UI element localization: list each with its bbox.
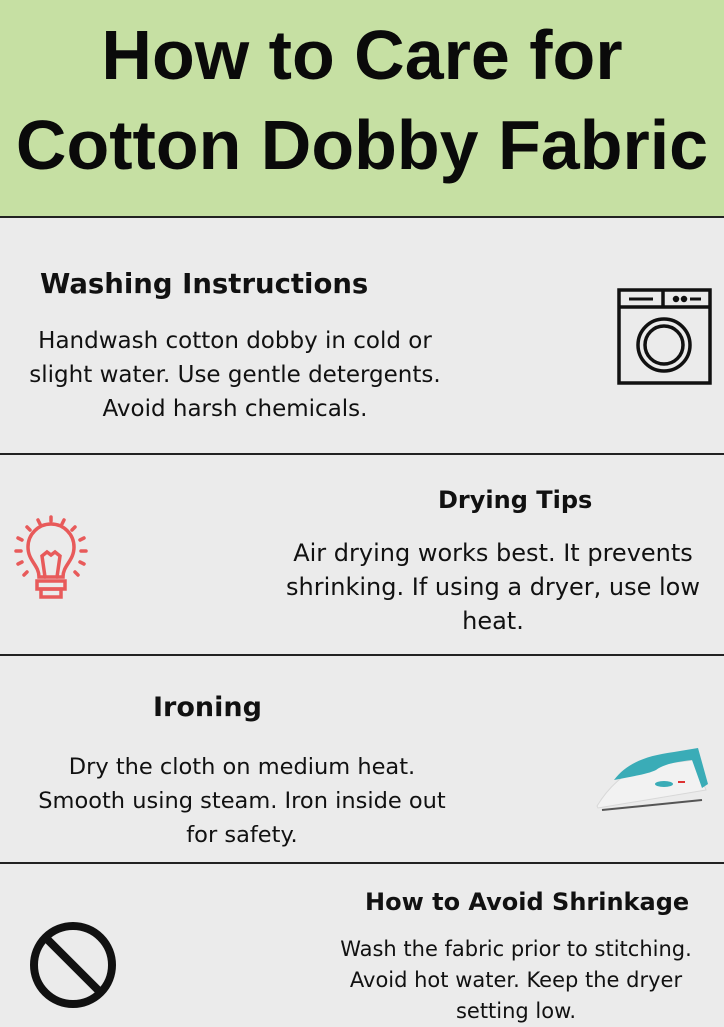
heading: shrinkage: How to Avoid Shrinkage: [365, 888, 689, 916]
text: drying: shrinking. If using a dryer, use low: [286, 573, 700, 601]
title band: [0, 0, 724, 216]
text: drying: Air drying works best. It prevents: [293, 539, 693, 567]
text: ironing: Smooth using steam. Iron inside out: [38, 788, 446, 814]
text: ironing: for safety.: [186, 822, 298, 848]
panel: ironing: [38, 692, 708, 848]
text: shrinkage: Wash the fabric prior to stitching.: [340, 937, 692, 961]
heading: washing: Washing Instructions: [40, 268, 368, 300]
text: shrinkage: setting low.: [456, 999, 576, 1023]
icon: washing machine: [617, 288, 712, 385]
text: shrinkage: Avoid hot water. Keep the dryer: [350, 968, 682, 992]
heading: ironing: Ironing: [153, 692, 262, 723]
text: washing: Avoid harsh chemicals.: [103, 396, 367, 422]
panel: shrinkage: [30, 888, 692, 1023]
title: [16, 16, 708, 184]
icon: iron: [596, 748, 708, 811]
icon: prohibited: [30, 922, 116, 1008]
panel: washing: [29, 268, 712, 422]
text: washing: Handwash cotton dobby in cold or: [38, 328, 432, 354]
text: drying: [286, 539, 700, 635]
title: Cotton Dobby Fabric: [16, 106, 708, 184]
panel: drying: [14, 486, 700, 635]
text: washing: [29, 328, 441, 422]
heading: drying: Drying Tips: [438, 486, 592, 514]
text: drying: heat.: [462, 607, 524, 635]
text: shrinkage: [340, 937, 692, 1023]
text: ironing: Dry the cloth on medium heat.: [69, 754, 415, 780]
text: washing: slight water. Use gentle detergents.: [29, 362, 441, 388]
icon: light bulb: [14, 515, 88, 599]
text: ironing: [38, 754, 446, 848]
title: How to Care for: [101, 16, 623, 94]
